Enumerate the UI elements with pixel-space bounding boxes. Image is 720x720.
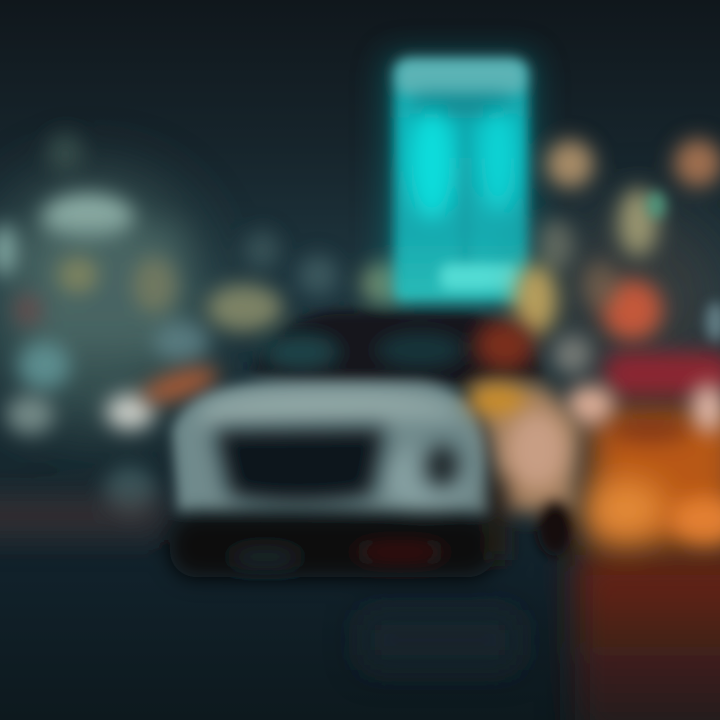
- left city lights: [0, 133, 210, 534]
- car: [170, 310, 580, 577]
- car right headlight: [424, 444, 460, 488]
- car grille: [215, 428, 385, 502]
- glowing cyan tower: [385, 55, 535, 310]
- right city lights: [513, 139, 720, 390]
- car side with warm reflection: [472, 385, 580, 515]
- road red reflection: [575, 555, 720, 720]
- distant mid-ground lights: [207, 230, 409, 332]
- wet road reflections: [360, 610, 520, 670]
- car hood: [172, 382, 488, 515]
- car bumper: [170, 515, 495, 577]
- right street glow and distant red car: [566, 352, 720, 545]
- car rear wheel: [537, 500, 573, 556]
- left headlight streak: [106, 360, 222, 430]
- car roof and windshield: [250, 310, 545, 385]
